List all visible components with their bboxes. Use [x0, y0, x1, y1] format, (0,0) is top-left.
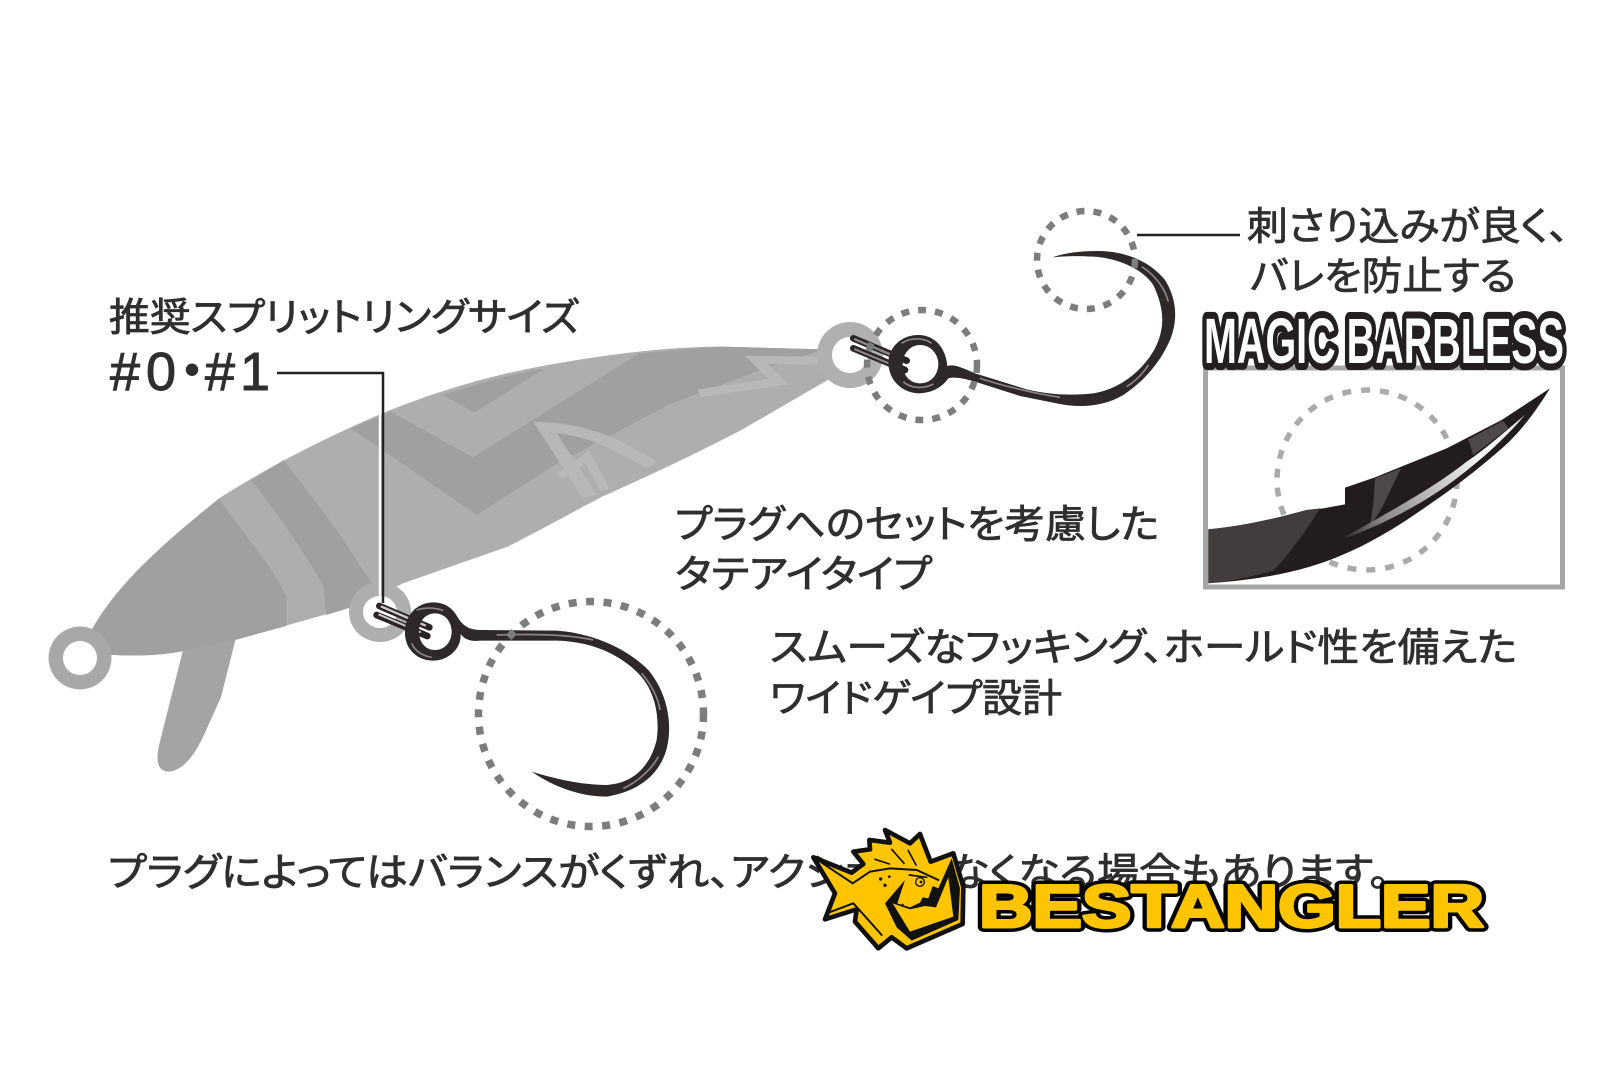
text: gape description: ワイドゲイプ設計: [770, 678, 1062, 721]
hook highlights: [902, 267, 1168, 397]
dashed circle: hook point: [1037, 211, 1135, 309]
split ring: [853, 338, 907, 370]
leader line: hook point: [1137, 234, 1240, 236]
eye ring: tail: [49, 626, 112, 690]
logo wordmark outline: BESTANGLER: [979, 873, 1484, 940]
text: hook point description: [1247, 206, 1569, 299]
dashed circle: wide gape: [478, 602, 704, 826]
text: ring sizes: #0・#1: [110, 342, 270, 402]
hook: lower: [377, 602, 669, 797]
hook highlights: [412, 608, 660, 788]
text: eye description: [675, 504, 1159, 597]
hook eye and shank: [888, 251, 1175, 406]
text: caution note: プラグによってはバランスがくずれ、アクションしなくなる場合もあります。: [108, 852, 1390, 895]
text: gape description: [770, 627, 1517, 721]
logo: Bestangler: [813, 830, 1484, 948]
split ring: [377, 606, 429, 636]
lure lip: [157, 636, 236, 772]
lure lighter pattern: [545, 360, 824, 497]
eye ring: nose: [817, 322, 883, 388]
illustration: plug lure silhouette: [49, 322, 883, 772]
hook: upper: [853, 251, 1175, 406]
eye ring: belly: [349, 582, 411, 642]
logo wordmark fill: BESTANGLER: [979, 873, 1484, 940]
text: gape description: スムーズなフッキング、ホールド性を備えた: [770, 627, 1517, 670]
panel: magic barbless detail: [1206, 368, 1562, 587]
lure body: [90, 347, 833, 656]
text: eye description: プラグへのセットを考慮した: [675, 504, 1159, 547]
lure stripes: [90, 347, 824, 656]
leader line: split ring size: [277, 373, 383, 603]
dashed circle: barb: [1277, 390, 1457, 570]
panel frame: [1206, 368, 1562, 587]
text: recommended split ring size: 推奨スプリットリングサイズ: [109, 297, 580, 340]
logo fish icon: [813, 830, 963, 948]
text: eye description: タテアイタイプ: [675, 554, 933, 597]
text: hook point description: バレを防止する: [1250, 256, 1516, 299]
hook eye and shank: [405, 602, 669, 797]
text: hook point description: 刺さり込みが良く、: [1247, 206, 1569, 249]
dashed circle: eye: [867, 310, 977, 420]
barb close-up: [1208, 388, 1550, 583]
